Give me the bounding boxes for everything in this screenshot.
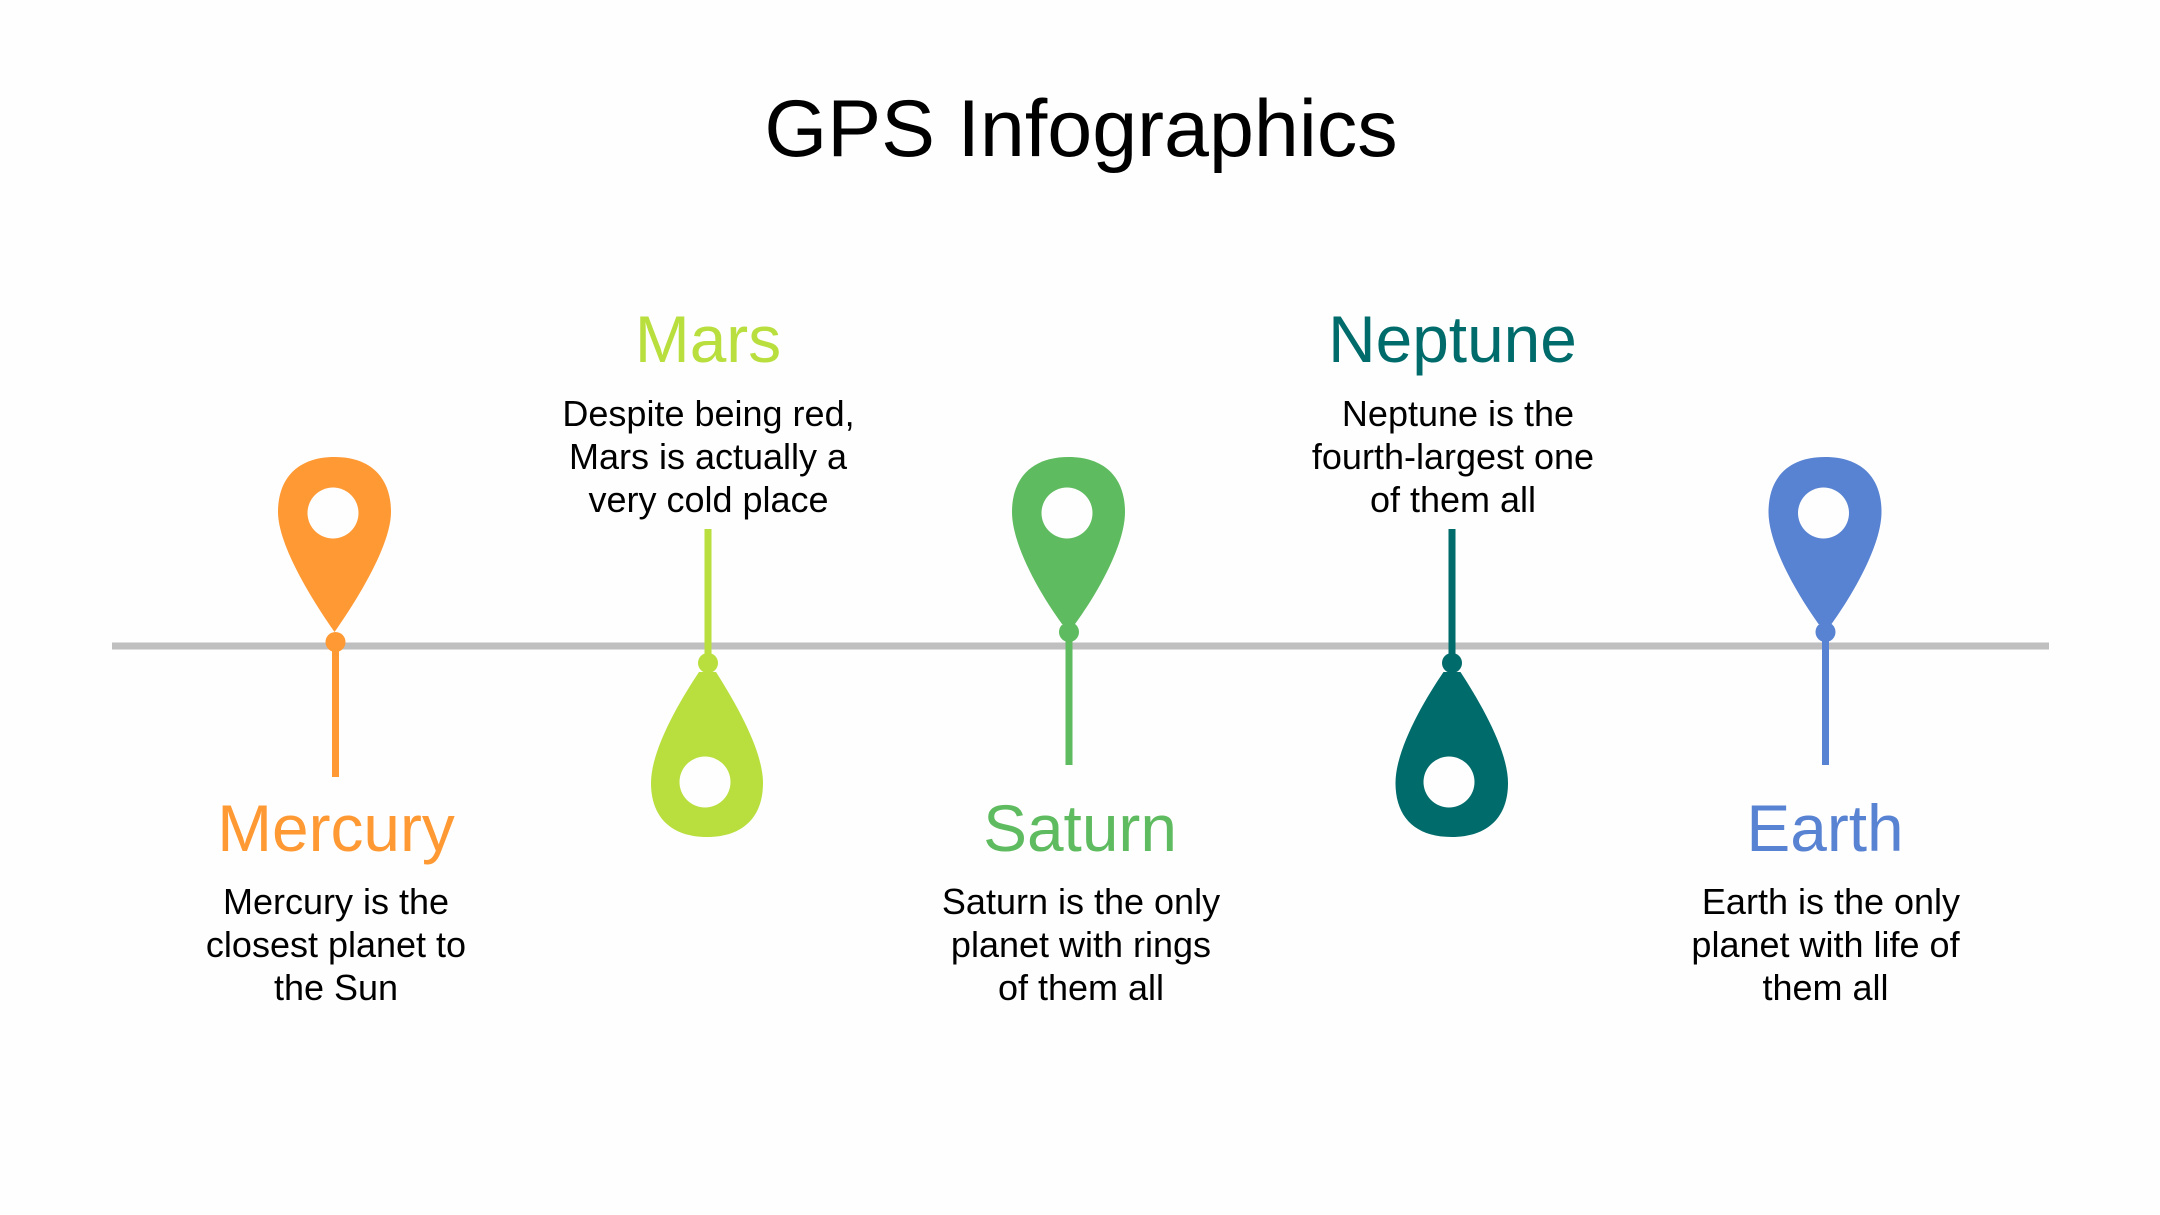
- text: Saturn description: of them all: [998, 967, 1164, 1008]
- timeline axis: [112, 642, 2049, 650]
- text: Neptune description: of them all: [1370, 479, 1536, 520]
- panel: Earth: [1691, 457, 1961, 1008]
- title: GPS Infographics: [764, 84, 1398, 174]
- text: Saturn description: planet with rings: [951, 924, 1211, 965]
- text: Neptune description: fourth-largest one: [1312, 436, 1594, 477]
- icon: Saturn pin: [1012, 457, 1125, 765]
- icon: Neptune pin: [1396, 529, 1508, 837]
- text: Mars description: Despite being red,: [562, 393, 855, 434]
- icon: Mercury pin: [278, 457, 391, 777]
- icon: Earth pin: [1768, 457, 1882, 765]
- panel: Saturn: [942, 457, 1220, 1008]
- text: Saturn description: Saturn is the only: [942, 881, 1220, 922]
- text: Mercury description: Mercury is the: [223, 881, 449, 922]
- text: Earth description: planet with life of: [1691, 924, 1961, 965]
- heading: Mars: Mars: [635, 302, 781, 376]
- icon: Mars pin: [651, 529, 763, 837]
- text: Mercury description: closest planet to: [206, 924, 466, 965]
- heading: Earth: Earth: [1746, 791, 1904, 865]
- heading: Saturn: Saturn: [983, 791, 1177, 865]
- panel: Mars: [562, 302, 855, 837]
- heading: Mercury: Mercury: [217, 791, 455, 865]
- heading: Neptune: Neptune: [1328, 302, 1577, 376]
- panel: Mercury: [206, 457, 466, 1008]
- text: Mars description: Mars is actually a: [569, 436, 848, 477]
- text: Mercury description: the Sun: [274, 967, 398, 1008]
- panel: Neptune: [1312, 302, 1594, 837]
- text: Neptune description: Neptune is the: [1342, 393, 1574, 434]
- text: Earth description: Earth is the only: [1702, 881, 1960, 922]
- text: Earth description: them all: [1762, 967, 1889, 1008]
- text: Mars description: very cold place: [588, 479, 829, 520]
